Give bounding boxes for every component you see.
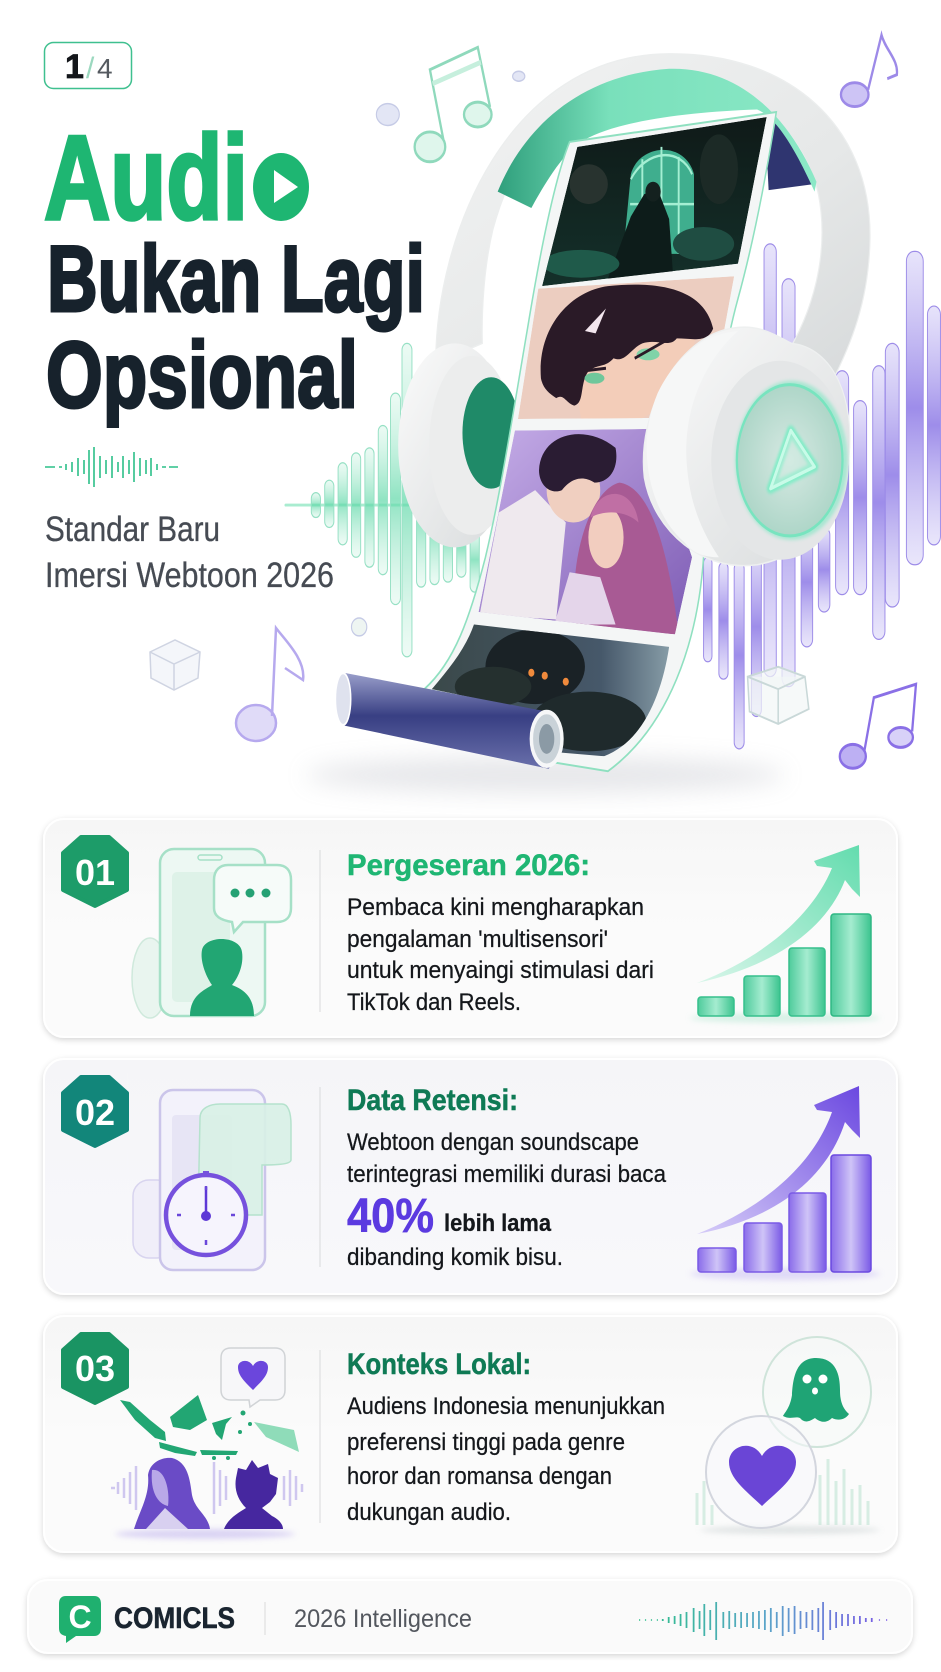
badge: page counter: 4 bbox=[97, 53, 113, 84]
ghost orb bbox=[763, 1337, 871, 1447]
badge: page counter: 1 bbox=[65, 48, 84, 86]
icon: phone with chat and reader bbox=[132, 849, 291, 1018]
footer background bbox=[28, 1580, 912, 1653]
music note: green top bbox=[415, 47, 492, 162]
number badge 01: 01 bbox=[75, 852, 115, 893]
manga panel 2: boy close-up bbox=[518, 276, 734, 420]
green sound wave bbox=[285, 343, 479, 657]
hero shadow bbox=[305, 757, 785, 793]
number badge 03: 03 bbox=[75, 1348, 115, 1389]
girl silhouette bbox=[134, 1458, 210, 1529]
number badge 02: 02 bbox=[75, 1092, 115, 1133]
card background bbox=[44, 819, 897, 1037]
subtitle: Imersi Webtoon 2026 bbox=[45, 556, 334, 595]
glowing play disc bbox=[735, 381, 848, 540]
growth chart green bbox=[690, 845, 880, 1023]
panel 01: Pergeseran 2026 bbox=[44, 819, 897, 1037]
manga panel 1: green gothic figure bbox=[542, 117, 767, 286]
footer bar bbox=[28, 1580, 912, 1653]
logo: COMICLS icon bbox=[59, 1596, 101, 1643]
logo: COMICLS icon: C bbox=[68, 1599, 92, 1635]
boy silhouette bbox=[224, 1460, 283, 1529]
card background bbox=[44, 1316, 897, 1552]
manga panel 3: couple on purple bbox=[479, 429, 692, 634]
heading: Konteks Lokal: bbox=[347, 1348, 531, 1381]
panel 03: Konteks Lokal bbox=[44, 1316, 897, 1552]
play triangle bbox=[771, 430, 815, 489]
card background bbox=[44, 1059, 897, 1294]
badge: page counter bbox=[44, 42, 132, 88]
number badge 01 bbox=[63, 837, 127, 906]
heading: Data Retensi: bbox=[347, 1084, 518, 1117]
body text bbox=[347, 1393, 665, 1526]
hero illustration: headphones and webtoon scroll bbox=[285, 35, 940, 771]
title bbox=[44, 111, 425, 427]
subtitle: Standar Baru bbox=[45, 510, 220, 549]
scroll back (navy behind band) bbox=[765, 115, 814, 190]
body text: dibanding komik bisu. bbox=[347, 1244, 563, 1271]
webtoon scroll frame bbox=[424, 112, 776, 771]
ice cube bbox=[748, 667, 809, 724]
badge: page counter: / bbox=[86, 52, 95, 85]
music note: purple bottom left bbox=[236, 628, 303, 741]
left ear cup bbox=[398, 343, 520, 547]
subtitle bbox=[45, 510, 334, 595]
music note: purple top right bbox=[841, 35, 897, 107]
body text: horor dan romansa dengan bbox=[347, 1463, 612, 1490]
body text: lebih lama bbox=[444, 1210, 552, 1237]
body text: Audiens Indonesia menunjukkan bbox=[347, 1393, 665, 1420]
body text: Webtoon dengan soundscape bbox=[347, 1129, 639, 1156]
title word: Audio: Audi bbox=[44, 111, 248, 245]
music note: purple bottom right bbox=[840, 684, 916, 768]
icon: Indonesia map, fans and heart bubble bbox=[111, 1348, 302, 1539]
body text bbox=[347, 1129, 667, 1271]
map of Indonesia bbox=[120, 1395, 299, 1460]
headband bbox=[436, 54, 870, 393]
body text: Pembaca kini mengharapkan bbox=[347, 894, 644, 921]
growth chart purple bbox=[690, 1086, 880, 1280]
green headband inner bbox=[498, 69, 816, 208]
number badge 02 bbox=[63, 1077, 127, 1146]
body text bbox=[347, 894, 654, 1016]
heart orb bbox=[706, 1416, 816, 1528]
icon: phone, scroll and stopwatch bbox=[133, 1090, 291, 1270]
title line 3: Opsional bbox=[46, 322, 358, 427]
body text: TikTok dan Reels. bbox=[347, 989, 521, 1016]
footer tagline: 2026 Intelligence bbox=[294, 1605, 472, 1633]
right ear cup bbox=[643, 327, 850, 566]
scroll roller bbox=[335, 673, 562, 769]
dividers bbox=[265, 850, 320, 1635]
body text: terintegrasi memiliki durasi baca bbox=[347, 1161, 667, 1188]
brand name: COMICLS bbox=[114, 1602, 235, 1635]
stat 40%: 40% bbox=[347, 1190, 434, 1243]
body text: untuk menyaingi stimulasi dari bbox=[347, 957, 654, 984]
heart speech bubble bbox=[221, 1348, 285, 1407]
manga panel 4: dark monster bbox=[432, 624, 669, 756]
body text: dukungan audio. bbox=[347, 1499, 511, 1526]
small ice cube bbox=[150, 640, 200, 690]
droplets bbox=[351, 71, 525, 636]
footer waveform bbox=[639, 1602, 887, 1640]
body text: pengalaman 'multisensori' bbox=[347, 926, 608, 953]
title line 2: Bukan Lagi bbox=[47, 226, 425, 331]
icon: ghost and heart glass orbs bbox=[697, 1337, 880, 1534]
small waveform under title bbox=[45, 447, 178, 487]
purple sound wave bbox=[704, 244, 940, 749]
number badge 03 bbox=[63, 1334, 127, 1403]
heading: Pergeseran 2026: bbox=[347, 849, 590, 882]
body text: preferensi tinggi pada genre bbox=[347, 1429, 625, 1456]
panel 02: Data Retensi bbox=[44, 1059, 897, 1294]
